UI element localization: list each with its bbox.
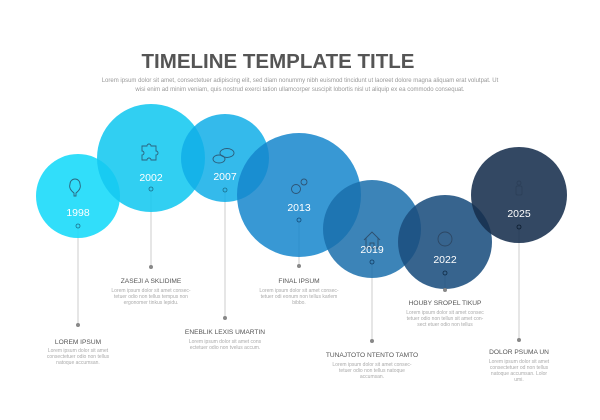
- event 2022: tetuer odio non tellun sit amet con-: [407, 316, 484, 322]
- event 2013: 2013: [287, 202, 311, 214]
- event 2002: tetuer odio non tellus tempus non: [114, 294, 188, 300]
- event 2013: Lorem ipsum dolor sit amet consec-: [259, 288, 339, 294]
- icon: puzzle: [142, 144, 158, 160]
- title: TIMELINE TEMPLATE TITLE: [142, 50, 414, 73]
- event 2019: 2019: [360, 244, 384, 256]
- event 2002: 2002: [139, 172, 163, 184]
- event 2022: sect etuer odio non tellus: [417, 322, 473, 328]
- event 2025: natoque accumsan. Lolor: [491, 371, 547, 377]
- event 1998: 1998: [66, 207, 90, 219]
- event 2022: Lorem ipsum dolor sit amet consec: [406, 310, 484, 316]
- event 2007: ENEBLIK LEXIS UMARTIN: [185, 329, 265, 336]
- event 1998: Lorem ipsum dolor sit amet: [48, 348, 109, 354]
- event 2025: [489, 181, 550, 383]
- event 2007: [185, 148, 265, 351]
- event 2022: HOUBY SROPEL TIKUP: [409, 300, 482, 307]
- event 2013: FINAL IPSUM: [278, 278, 320, 285]
- event 2007: Lorem ipsum dolor sit amet cons: [189, 339, 262, 345]
- icon: person: [516, 181, 522, 195]
- icon: bulb: [70, 179, 80, 196]
- event 1998: consectetuer odio non tellus: [47, 354, 110, 360]
- event 2025: umi.: [514, 377, 524, 383]
- subtitle: Lorem ipsum dolor sit amet, consectetuer adipiscing elit, sed diam nonummy nibh euismod tincidunt ut laoreet dolore magna aliquam erat volutpat. Ut: [102, 78, 499, 84]
- event 1998: LOREM IPSUM: [55, 339, 101, 346]
- event 2019: [326, 232, 418, 380]
- event 2019: TUNAJTOTO NTENTO TAMTO: [326, 352, 418, 359]
- event 2022: 2022: [433, 254, 457, 266]
- event 2002: ergonomer tinkus lepidu.: [124, 300, 178, 306]
- event 2025: consectetuer od non tellus: [490, 365, 549, 371]
- subtitle: [102, 78, 499, 93]
- icon: speech bubbles: [213, 148, 234, 163]
- event 2019: tetuer odio non tellus natoque: [339, 368, 405, 374]
- connector lines: [78, 188, 519, 341]
- event 2002: ZASEJI A SKLIDIME: [121, 278, 182, 285]
- icon: globe: [438, 232, 452, 246]
- subtitle: wisi enim ad minim veniam, quis nostrud exerci tation ullamcorper suscipit lobortis nisl ut aliquip ex ea commodo consequat.: [134, 87, 465, 93]
- icon: gears: [292, 179, 307, 194]
- icon: house: [364, 232, 380, 248]
- event 2013: bibbo.: [292, 300, 306, 306]
- event 2025: DOLOR PSUMA UN: [489, 349, 549, 356]
- circles: [36, 104, 567, 289]
- event 1998: [47, 179, 110, 366]
- event 2013: [259, 179, 339, 306]
- event 1998: natoque accumsan.: [56, 360, 100, 366]
- event 2002: Lorem ipsum dolor sit amet consec-: [111, 288, 191, 294]
- event 2025: 2025: [507, 208, 531, 220]
- event 2007: ectetuer odio non tvelus accum.: [190, 345, 260, 351]
- event 2019: accumsan.: [360, 374, 384, 380]
- event 2002: [111, 144, 191, 306]
- event 2013: tetuer odi eonum non tellus karlem: [261, 294, 337, 300]
- event 2025: Lorem ipsum dolor sit amet: [489, 359, 550, 365]
- event 2019: Lorem ipsum dolor sit amet consec-: [332, 362, 412, 368]
- event 2007: 2007: [213, 171, 237, 183]
- event 2022: [406, 232, 484, 328]
